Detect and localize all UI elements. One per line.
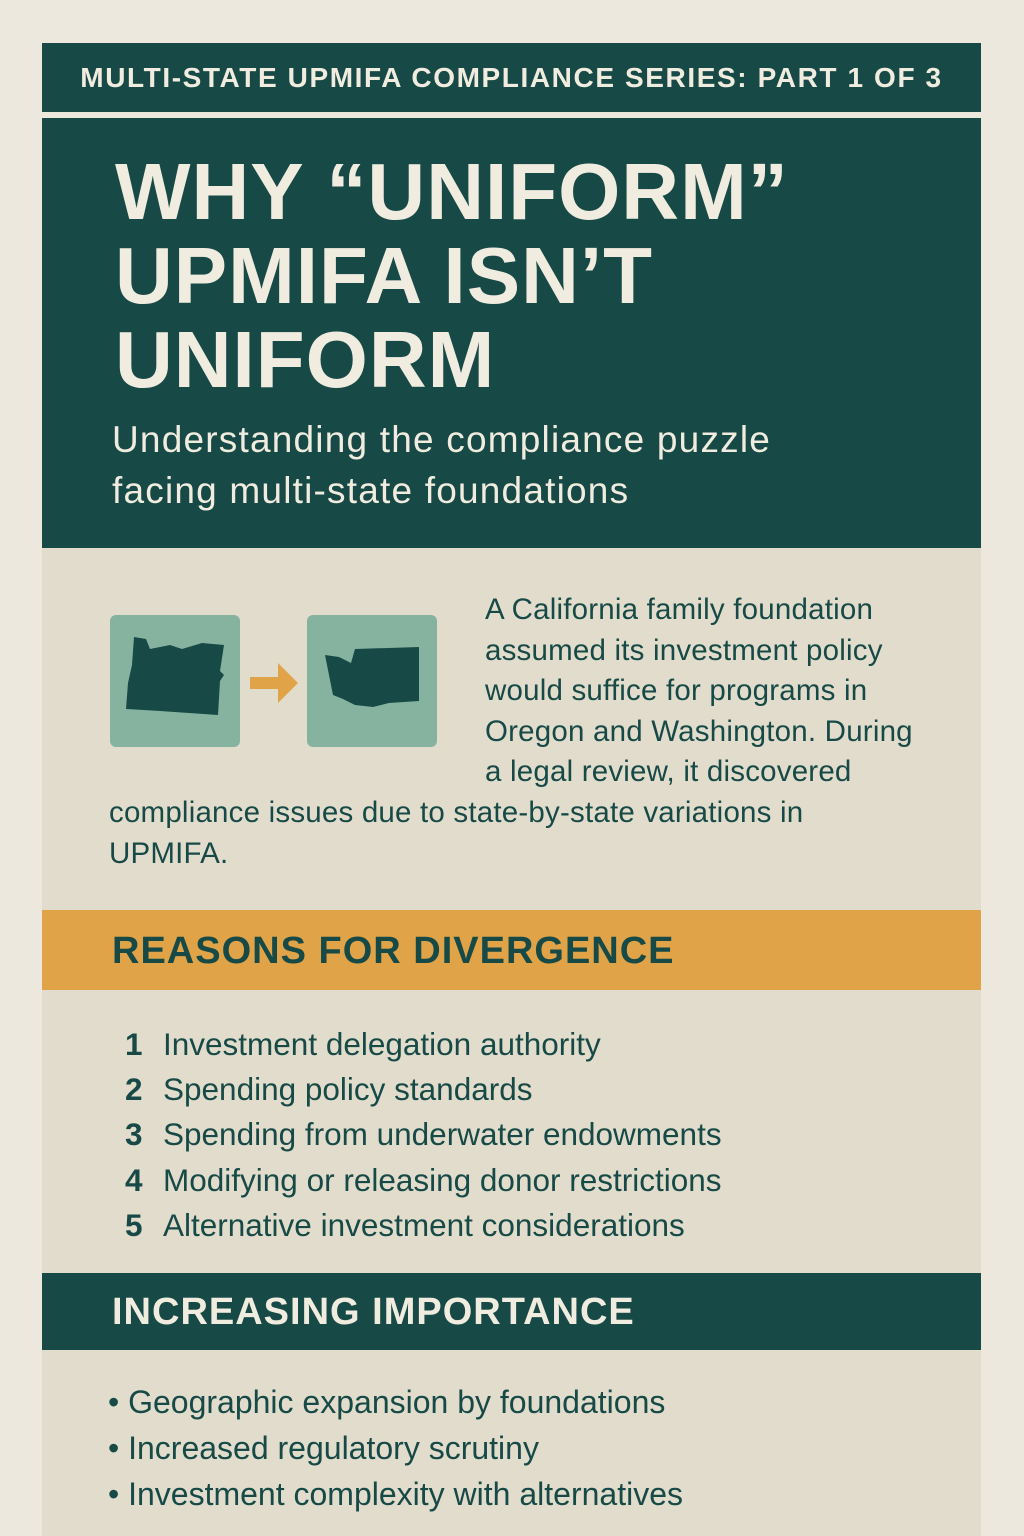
panel: reasons list: Modifying or releasing donor restrictions <box>163 1162 722 1198</box>
story text: A California family foundation <box>485 593 873 626</box>
panel: case story: compliance issues due to state-by-state variations in <box>109 796 803 829</box>
heading: increasing importance <box>42 1273 981 1350</box>
story text: assumed its investment policy <box>485 634 883 666</box>
panel: importance bullets: • Increased regulatory scrutiny <box>108 1430 539 1466</box>
panel: reasons list <box>42 990 981 1273</box>
panel: reasons list: 2 <box>125 1071 143 1107</box>
panel: reasons list: Spending from underwater endowments <box>163 1116 722 1152</box>
title <box>115 147 789 404</box>
title block <box>42 118 981 548</box>
panel: reasons list: 4 <box>125 1162 143 1198</box>
title: UPMIFA ISN’T <box>115 231 653 320</box>
panel: reasons list: 1 <box>125 1026 143 1062</box>
story text: would suffice for programs in <box>485 674 867 707</box>
panel: importance bullets: • Geographic expansion by foundations <box>108 1384 665 1420</box>
title: WHY “UNIFORM” <box>115 147 789 236</box>
panel: reasons list: Investment delegation authority <box>163 1026 601 1062</box>
panel: importance bullets <box>42 1350 981 1536</box>
arrow <box>250 663 298 703</box>
panel: importance bullets: • Investment complexity with alternatives <box>108 1476 683 1512</box>
subtitle: facing multi-state foundations <box>112 470 629 511</box>
story text: Oregon and Washington. During <box>485 714 913 748</box>
panel: reasons list: 5 <box>125 1207 143 1243</box>
heading: increasing importance: INCREASING IMPORTANCE <box>112 1291 635 1333</box>
title: UNIFORM <box>115 315 495 404</box>
panel: reasons list: Alternative investment considerations <box>163 1207 685 1243</box>
series banner <box>42 43 981 112</box>
panel: case story: UPMIFA. <box>109 836 228 870</box>
subtitle: Understanding the compliance puzzle <box>112 419 771 460</box>
panel: reasons list: Spending policy standards <box>163 1071 532 1107</box>
heading: reasons for divergence: REASONS FOR DIVERGENCE <box>112 930 675 972</box>
panel: case story <box>42 548 981 910</box>
series banner: MULTI-STATE UPMIFA COMPLIANCE SERIES: PART 1 OF 3 <box>80 62 943 92</box>
heading: reasons for divergence <box>42 910 981 990</box>
story text <box>485 593 913 788</box>
story text: a legal review, it discovered <box>485 755 852 788</box>
subtitle <box>112 419 771 511</box>
icon: Oregon <box>110 615 240 747</box>
icon: Washington <box>307 615 437 747</box>
panel: reasons list: 3 <box>125 1116 143 1152</box>
